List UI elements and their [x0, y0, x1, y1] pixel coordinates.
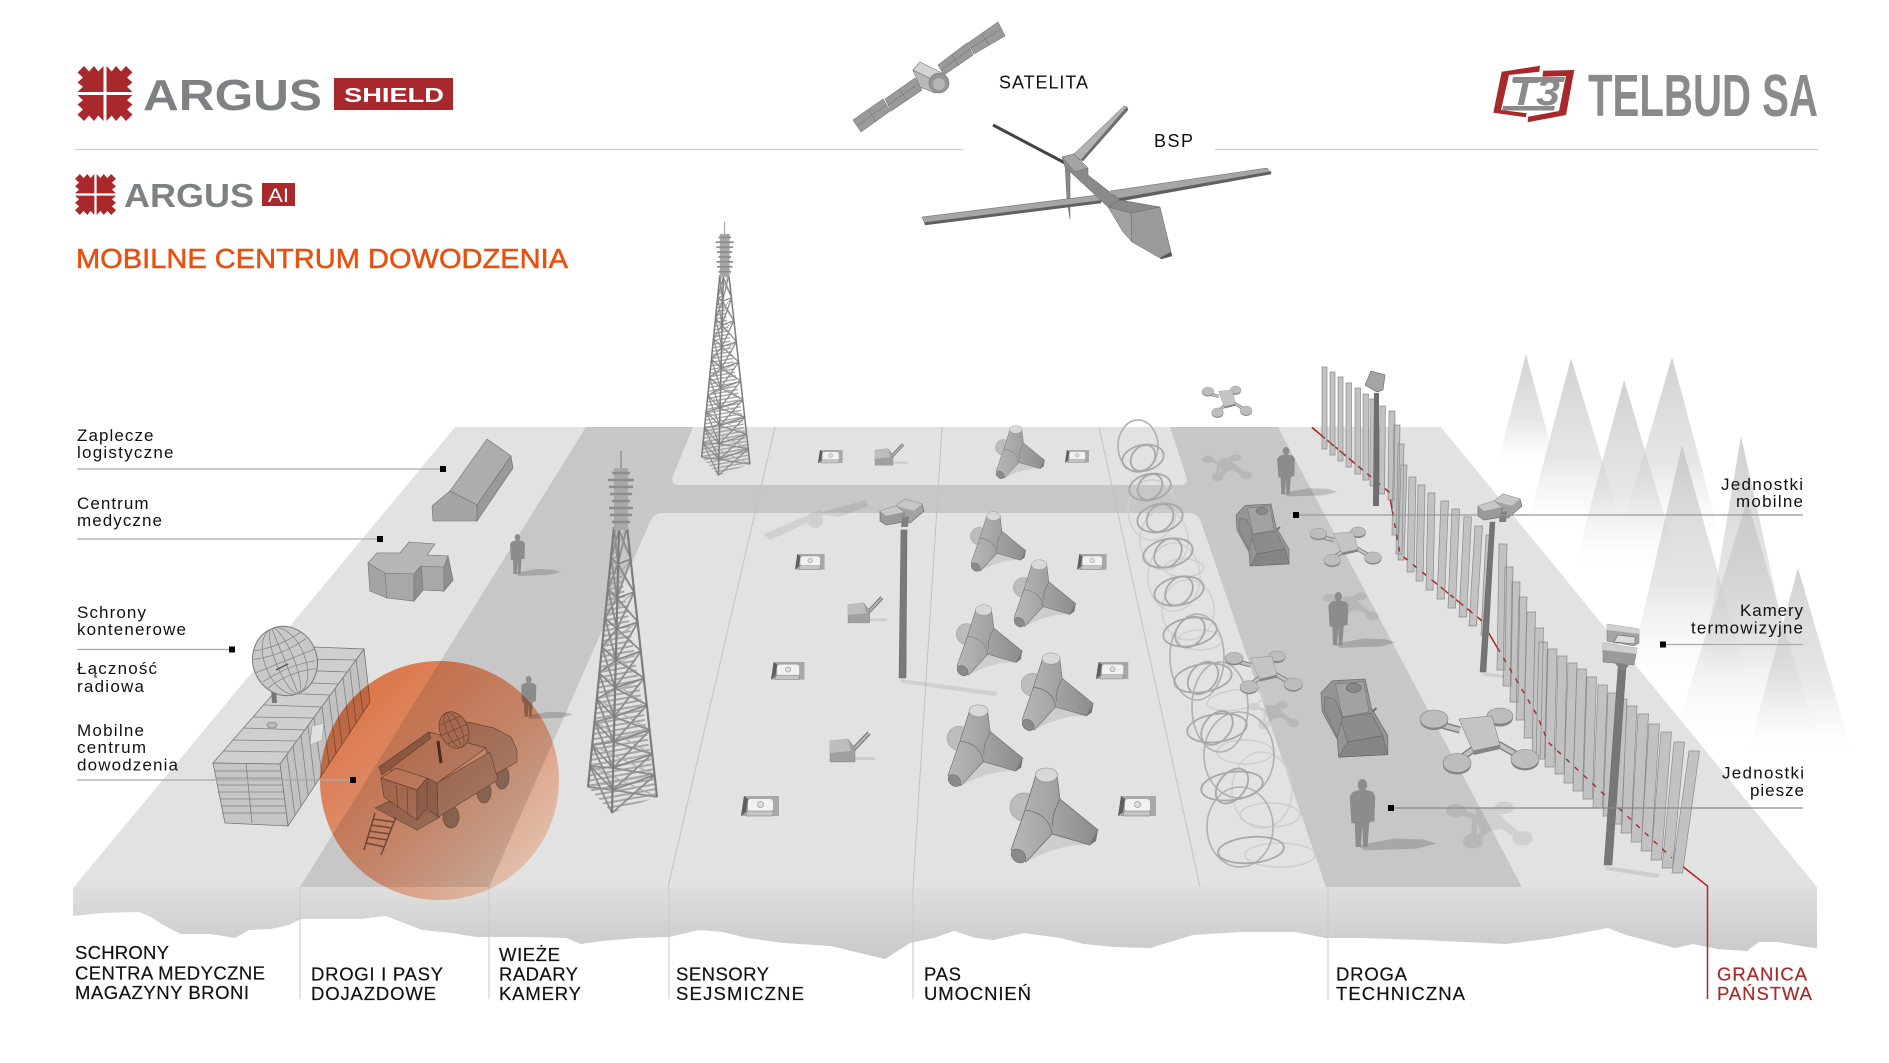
left callout: Łączność radiowa: [77, 659, 158, 696]
camera pole in sensor zone: [880, 499, 998, 696]
left callout: Zaplecze logistyczne: [77, 426, 446, 472]
zone label: pas umocnień: [924, 964, 1031, 1004]
right callout: Jednostki piesze: Jednostki: [1722, 764, 1804, 782]
zone label: drogi: DOJAZDOWE: [311, 983, 436, 1004]
patrol vehicles: [1236, 504, 1388, 757]
zone label: drogi: [311, 964, 443, 1004]
title: MOBILNE CENTRUM DOWODZENIA: [76, 243, 569, 274]
border camera poles: [1365, 371, 1660, 878]
zone label: wieże: WIEŻE: [499, 944, 560, 965]
border fence: [1322, 367, 1700, 873]
zone label: wieże: RADARY: [499, 964, 578, 984]
zone label: droga techniczna: [1336, 964, 1466, 1004]
turrets: [830, 444, 907, 762]
logo: Argus Shield: ARGUS: [143, 71, 322, 120]
radio dish: [242, 617, 328, 705]
right callout: Jednostki mobilne: Jednostki: [1721, 475, 1803, 494]
satellite: [853, 22, 1005, 132]
trees in the background: [1497, 354, 1852, 752]
right callout: Kamery termowizyjne: [1660, 601, 1804, 648]
logo: Argus AI: AI: [268, 186, 289, 207]
terrain front face with torn edge: [73, 887, 1817, 959]
zone label: granica państwa: [1717, 964, 1813, 1004]
front light panel: [489, 513, 1326, 887]
zone label: granica państwa: PAŃSTWA: [1717, 983, 1813, 1004]
zone label: pas umocnień: UMOCNIEŃ: [924, 983, 1031, 1004]
front tower: [588, 451, 657, 813]
left callout: Centrum medyczne: [77, 494, 383, 542]
persons on left road: [510, 534, 573, 719]
left callout: Łączność radiowa: radiowa: [77, 677, 145, 696]
left callout: Schrony kontenerowe: Schrony: [77, 603, 146, 622]
zone label: droga techniczna: DROGA: [1336, 964, 1408, 984]
zone label: schrony: MAGAZYNY BRONI: [75, 982, 249, 1003]
road strips: [300, 427, 1522, 887]
right callout: Jednostki mobilne: [1293, 475, 1803, 518]
logo: Telbud SA: T3: [1510, 72, 1560, 114]
zone label: wieże: KAMERY: [499, 983, 581, 1004]
orange highlight circle: [320, 661, 559, 900]
shadows of drones and satellite on ground: [764, 454, 1533, 848]
zone label: sensory: [676, 964, 804, 1004]
logo: Argus AI: ARGUS: [124, 177, 254, 214]
UAV drone: [922, 106, 1271, 259]
zone label: pas umocnień: PAS: [924, 964, 961, 984]
foot patrols: [1277, 447, 1436, 850]
zone label: droga techniczna: TECHNICZNA: [1336, 983, 1466, 1004]
right callout: Kamery termowizyjne: Kamery: [1740, 601, 1804, 620]
logo: Argus Shield: SHIELD: [344, 85, 444, 107]
zone label: schrony: CENTRA MEDYCZNE: [75, 962, 265, 984]
zone label: drogi: DROGI I PASY: [311, 964, 443, 984]
left callout: Schrony kontenerowe: [77, 603, 235, 652]
zone label: wieże: [499, 944, 581, 1004]
right callout: Jednostki piesze: [1388, 764, 1804, 811]
logo: Telbud SA: [1493, 63, 1818, 129]
surveillance drones on road: [1225, 527, 1539, 774]
left callout: Mobilne centrum dowodzenia: dowodzenia: [77, 756, 179, 774]
left callout: Zaplecze logistyczne: Zaplecze: [77, 426, 154, 445]
logo: Argus AI: [75, 174, 295, 215]
left callout: Centrum medyczne: Centrum: [77, 494, 148, 513]
zone label: sensory: SEJSMICZNE: [676, 983, 804, 1004]
left callout: Mobilne centrum dowodzenia: Mobilne: [77, 721, 144, 740]
left callout: Schrony kontenerowe: kontenerowe: [77, 620, 186, 639]
left callout: Mobilne centrum dowodzenia: [77, 721, 356, 783]
building: logistics hangar: [432, 439, 513, 521]
satellite label: SATELITA: [999, 72, 1088, 92]
zone label: schrony: [75, 942, 265, 1003]
border line segments visible across fence: [1312, 428, 1672, 858]
rear light panel: [672, 427, 1187, 485]
tetrapod anti-tank obstacles: [946, 426, 1098, 866]
rear tower: [702, 222, 750, 475]
UAV label: BSP: [1154, 131, 1193, 151]
zone label: schrony: SCHRONY: [75, 942, 169, 963]
zone label: granica państwa: GRANICA: [1717, 964, 1808, 984]
container shelter with radio dish: [213, 617, 370, 826]
right callout: Kamery termowizyjne: termowizyjne: [1691, 618, 1803, 638]
zone label: sensory: SENSORY: [676, 964, 769, 984]
truck dish: [433, 707, 475, 763]
building: medical cross: [368, 542, 453, 601]
truck ladder: [364, 813, 396, 855]
top divider lines: [75, 148, 1818, 150]
drone in the air: [1202, 386, 1252, 418]
coiled razor wire: [1118, 420, 1315, 867]
left callout: Łączność radiowa: Łączność: [77, 659, 158, 678]
left callout: Mobilne centrum dowodzenia: centrum: [77, 738, 146, 757]
zone divider lines: [668, 427, 1200, 887]
terrain plate: [73, 427, 1817, 999]
border line: [1312, 428, 1708, 999]
left callout: Centrum medyczne: medyczne: [77, 511, 162, 530]
right callout: Jednostki mobilne: mobilne: [1736, 492, 1803, 511]
left callout: Zaplecze logistyczne: logistyczne: [77, 443, 174, 462]
mobile command truck: [364, 707, 517, 855]
logo: Argus Shield: [78, 66, 453, 121]
seismic sensors: [741, 450, 1156, 816]
right callout: Jednostki piesze: piesze: [1750, 781, 1804, 800]
